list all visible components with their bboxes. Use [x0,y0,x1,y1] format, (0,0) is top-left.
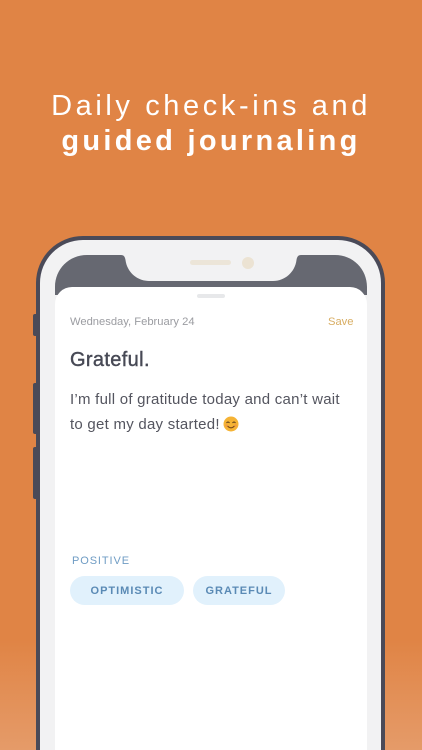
save button: Save [328,316,354,328]
tag: grateful [193,576,285,605]
tag: optimistic: OPTIMISTIC [91,585,163,597]
entry text line 2: to get my day started! [70,416,220,433]
entry text line 1: I’m full of gratitude today and can’t wait [70,391,340,408]
phone mockup [33,236,385,750]
side button: volume down [33,447,37,499]
speaker [190,260,231,265]
icon: smiling emoji [224,416,238,432]
entry heading: Grateful. [70,349,150,371]
tag: grateful: GRATEFUL [205,585,273,597]
category label: POSITIVE [72,555,130,567]
screen top with notch [55,255,367,295]
phone body [36,236,385,750]
side button: mute [33,314,37,336]
tag: optimistic [70,576,184,605]
camera [242,257,254,269]
date: Wednesday, February 24 [70,316,195,328]
app screen [55,287,367,750]
side button: volume up [33,383,37,434]
title [51,90,371,157]
title line 2: guided journaling [61,125,361,157]
entry text [70,391,340,433]
title line 1: Daily check-ins and [51,90,371,122]
sheet handle [197,294,225,298]
